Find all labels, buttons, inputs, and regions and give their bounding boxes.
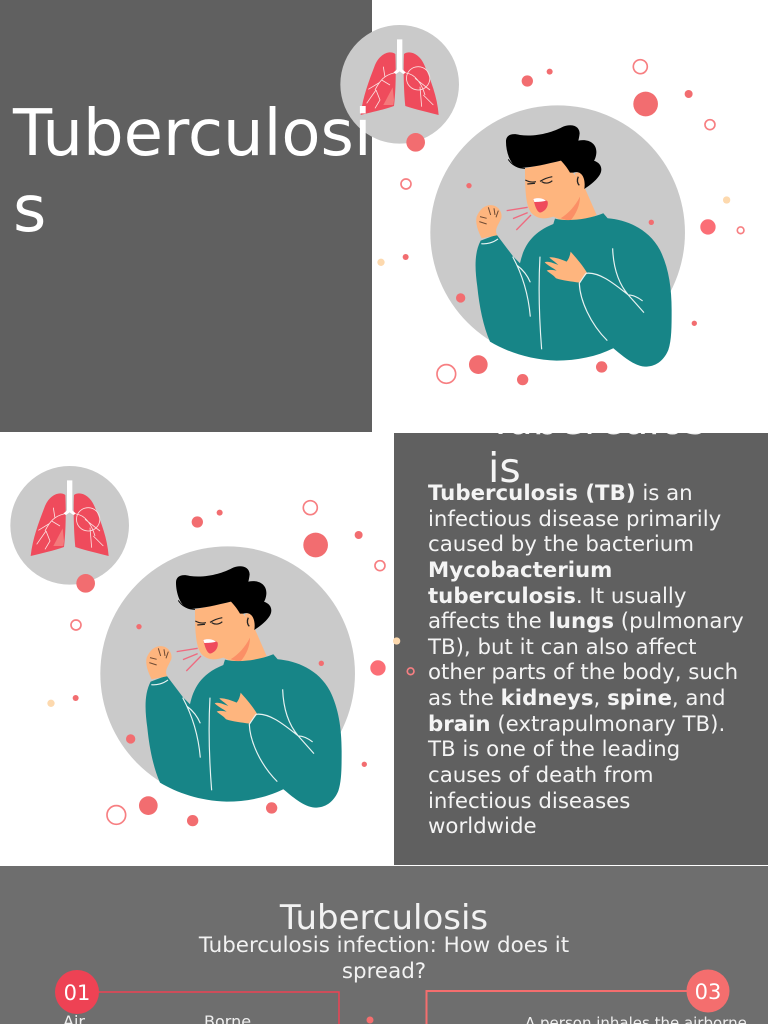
connector frames and step markers [55, 970, 730, 1024]
connector: step 01 [77, 992, 339, 1024]
clipped panel heading: is [488, 444, 521, 492]
panel: definition background [394, 433, 768, 865]
text block: definition: affects the lungs (pulmonary [428, 609, 744, 634]
panel: title background [0, 0, 372, 432]
text block: definition: as the kidneys, spine, and [428, 686, 726, 711]
text block: definition: tuberculosis. It usually [428, 584, 686, 608]
title [12, 97, 372, 247]
section subtitle [198, 933, 569, 984]
text block: definition: infectious disease primarily [428, 507, 721, 532]
text block: definition: TB is one of the leading [428, 737, 680, 762]
centre dot [366, 1016, 374, 1024]
text block: definition: other parts of the body, such [428, 660, 738, 685]
text block: definition: worldwide [428, 814, 537, 839]
text block: definition [428, 481, 744, 839]
title: s [13, 173, 46, 247]
section subtitle: Tuberculosis infection: How does it [199, 933, 569, 958]
step 01 text [63, 1012, 251, 1024]
section subtitle: spread? [342, 959, 426, 984]
marker: 01: 01 [64, 981, 90, 1005]
text block: definition: infectious diseases [428, 788, 630, 814]
text block: definition: TB), but it can also affect [428, 635, 696, 660]
marker: 03: 03 [695, 980, 721, 1004]
marker: 03 [686, 970, 730, 1012]
text block: definition: causes of death from [428, 763, 653, 788]
marker: 01 [55, 970, 99, 1014]
text block: definition: Mycobacterium [428, 558, 612, 583]
text block: definition: Tuberculosis (TB) is an [428, 481, 693, 506]
clipped panel heading [488, 433, 706, 492]
top illustration [340, 25, 744, 385]
text block: definition: brain (extrapulmonary TB). [428, 712, 725, 737]
connector: step 03 [426, 991, 708, 1024]
text block: definition: caused by the bacterium [428, 532, 694, 557]
title: Tuberculosi [13, 97, 372, 171]
lower illustration [10, 466, 414, 826]
panel: spread section background [0, 866, 768, 1024]
section heading: Tuberculosis [280, 898, 488, 938]
